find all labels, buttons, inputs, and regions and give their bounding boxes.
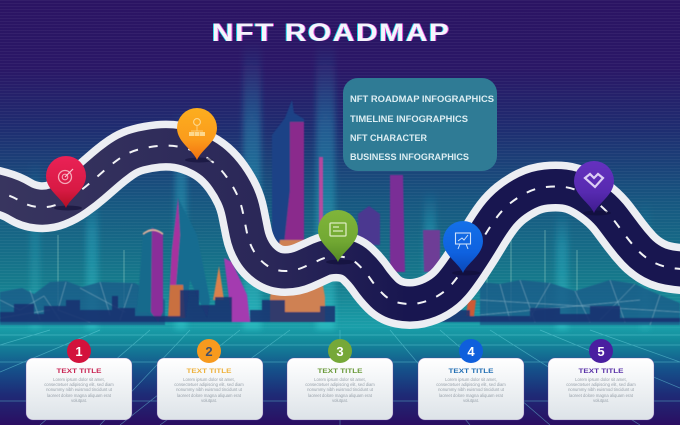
pin 1: target icon	[46, 156, 86, 210]
tower: left	[137, 226, 163, 322]
card 4	[418, 339, 524, 420]
card 5: volutpat.	[593, 398, 609, 403]
panel: topic list: TIMELINE INFOGRAPHICS	[350, 113, 468, 124]
card 1	[26, 339, 132, 420]
badge 2: 2	[205, 344, 213, 359]
pin 4: presentation icon	[443, 221, 483, 276]
card 5: TEXT TITLE	[578, 368, 624, 375]
card 4: nonummy nibh euismod tincidunt ut	[438, 387, 505, 392]
pin 5: handshake icon	[574, 161, 614, 216]
pin 3: chart board icon	[318, 210, 358, 264]
card 2: TEXT TITLE	[186, 368, 232, 375]
card 4: volutpat.	[463, 398, 479, 403]
road	[0, 146, 680, 304]
card 1: nonummy nibh euismod tincidunt ut	[46, 387, 113, 392]
title: NFT ROADMAP	[211, 18, 448, 46]
card 4: laoreet dolore magna aliquam erat	[439, 393, 504, 398]
card 3: laoreet dolore magna aliquam erat	[308, 393, 373, 398]
panel: topic list: NFT CHARACTER	[350, 132, 427, 143]
badge 4: 4	[467, 344, 475, 359]
thin light poles	[58, 230, 577, 322]
card 1: laoreet dolore magna aliquam erat	[47, 393, 112, 398]
card 5	[548, 339, 654, 420]
panel: topic list	[343, 78, 497, 171]
card 5: nonummy nibh euismod tincidunt ut	[568, 387, 635, 392]
title: NFT ROADMAP	[213, 18, 450, 46]
card 3: Lorem ipsum dolor sit amet,	[314, 377, 366, 382]
card 5: laoreet dolore magna aliquam erat	[569, 393, 634, 398]
panel: topic list: BUSINESS INFOGRAPHICS	[350, 151, 469, 162]
card 4: TEXT TITLE	[448, 368, 494, 375]
tower: central skyscraper	[270, 100, 325, 322]
card 5: consectetuer adipiscing elit, sed diam	[566, 382, 636, 387]
card 1: TEXT TITLE	[56, 368, 102, 375]
card 2: laoreet dolore magna aliquam erat	[177, 393, 242, 398]
floor grid	[0, 330, 680, 425]
badge 5: 5	[597, 344, 605, 359]
pin 2: team icon	[177, 108, 217, 162]
card 3: consectetuer adipiscing elit, sed diam	[305, 382, 375, 387]
tower: twisted	[168, 198, 210, 318]
card 3	[287, 339, 393, 420]
card 1: consectetuer adipiscing elit, sed diam	[44, 382, 114, 387]
card 4: Lorem ipsum dolor sit amet,	[445, 377, 497, 382]
mountains wireframe	[0, 280, 680, 325]
card 1: Lorem ipsum dolor sit amet,	[53, 377, 105, 382]
title: NFT ROADMAP	[212, 18, 449, 46]
card 2	[157, 339, 263, 420]
tower: right pair	[358, 175, 476, 316]
tower: wedge	[213, 258, 250, 322]
badge 1: 1	[75, 344, 83, 359]
card 2: consectetuer adipiscing elit, sed diam	[174, 382, 244, 387]
card 1: volutpat.	[71, 398, 87, 403]
card 2: Lorem ipsum dolor sit amet,	[183, 377, 235, 382]
card 2: nonummy nibh euismod tincidunt ut	[176, 387, 243, 392]
card 4: consectetuer adipiscing elit, sed diam	[436, 382, 506, 387]
card 2: volutpat.	[201, 398, 217, 403]
city skyline	[0, 100, 680, 322]
card 3: volutpat.	[332, 398, 348, 403]
card 3: nonummy nibh euismod tincidunt ut	[307, 387, 374, 392]
card 3: TEXT TITLE	[318, 368, 363, 375]
foreground blocks	[0, 290, 680, 322]
panel: topic list: NFT ROADMAP INFOGRAPHICS	[350, 93, 494, 104]
badge 3: 3	[336, 344, 344, 359]
card 5: Lorem ipsum dolor sit amet,	[575, 377, 627, 382]
light beams	[30, 40, 650, 330]
